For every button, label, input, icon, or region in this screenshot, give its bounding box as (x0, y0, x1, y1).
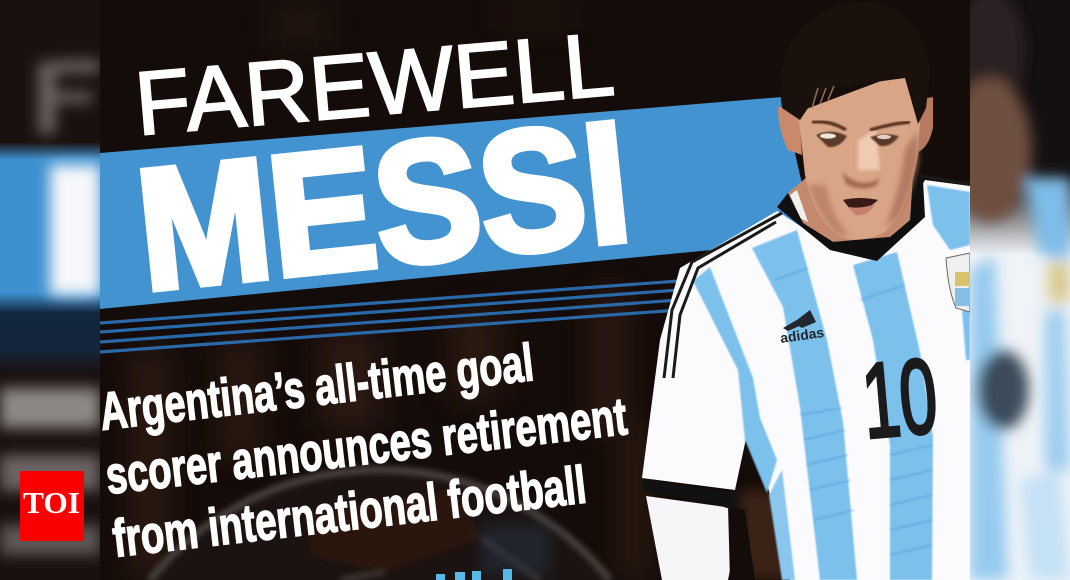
subtitle text block: scorer announces retirement (103, 387, 630, 506)
brows (812, 122, 846, 130)
right blurred panel (970, 0, 1070, 580)
hair (780, 72, 928, 124)
background: dark stadium (124, 3, 782, 580)
left blurred panel (0, 0, 100, 580)
blurred jersey (1025, 178, 1070, 260)
mouth (843, 198, 878, 210)
football graphic behind subtitle (150, 470, 610, 580)
ears (778, 106, 802, 155)
skin (798, 72, 920, 240)
adidas logo (781, 310, 824, 343)
TOI logo: TOI (23, 485, 80, 520)
subtitle text block: Argentina’s all-time goal (97, 333, 536, 442)
blurred title letters (50, 165, 100, 295)
player photo illustration (642, 78, 970, 580)
player arm (646, 496, 755, 580)
hair strands (812, 86, 834, 108)
face shading (808, 185, 850, 236)
jersey body (642, 180, 970, 580)
jersey blue stripes (693, 185, 970, 580)
blue title band (100, 97, 815, 309)
heading: FAREWELL: FAREWELL (131, 15, 618, 155)
TOI logo (20, 471, 84, 541)
jersey fold shadows (775, 268, 932, 555)
shoulder stripes (664, 176, 970, 378)
eyes (816, 132, 847, 147)
sleeve cuff (642, 480, 735, 510)
blurred number (977, 350, 1029, 430)
blurred subtitle (0, 388, 100, 428)
neck (788, 178, 913, 242)
jersey collar (777, 177, 925, 261)
heading: MESSI: MESSI (129, 85, 638, 327)
subtitle text block (97, 333, 630, 569)
partial blue text cropped at bottom (436, 569, 512, 580)
blurred head (970, 0, 1027, 92)
face (778, 72, 933, 240)
adidas logo: adidas (779, 324, 825, 346)
subtitle text block: from international football (110, 456, 589, 569)
shirt number 10: 10 (858, 337, 942, 461)
decorative blue stripes under band (100, 278, 720, 352)
Argentina crest (946, 253, 970, 312)
